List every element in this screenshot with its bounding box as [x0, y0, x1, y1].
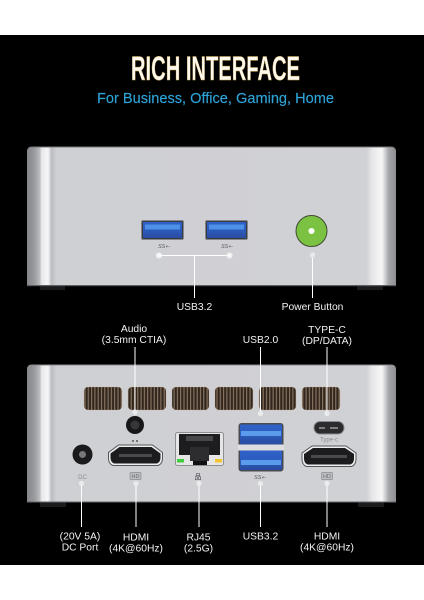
panel: front of mini PC: [27, 147, 396, 290]
label: DC Port: DC Port: [62, 542, 98, 553]
label: HDMI right: (4K@60Hz): [300, 542, 354, 553]
title: RICH INTERFACE: [131, 50, 300, 88]
label: HDMI left: (4K@60Hz): [109, 543, 163, 554]
subtitle: For Business, Office, Gaming, Home: [97, 91, 334, 107]
label: TYPE-C: TYPE-C: [308, 325, 346, 336]
label: DC Port: (20V 5A): [60, 532, 100, 542]
label: RJ45: (2.5G): [184, 543, 213, 554]
icon: front USB port right: [206, 220, 248, 250]
label: USB2.0: USB2.0: [243, 335, 279, 346]
icon: DC jack: DC: [78, 475, 87, 481]
icon: HDMI port right: HD: [323, 474, 331, 480]
label: HDMI right: HDMI: [314, 532, 340, 542]
label: USB3.2 rear: USB3.2: [243, 532, 279, 542]
vents: [84, 387, 340, 410]
icon: Type-C port: [314, 422, 344, 444]
icon: stacked USB ports: [238, 423, 284, 481]
callout: front USB3.2 connector: [156, 253, 232, 298]
icon: DC jack: [72, 444, 92, 481]
icon: HDMI port left: [108, 445, 162, 480]
icon: HDMI port left: HD: [132, 474, 139, 480]
icon: RJ45 port: 品: [194, 473, 202, 481]
icon: front USB port left: [142, 220, 184, 250]
label: HDMI left: HDMI: [123, 532, 149, 544]
icon: audio jack: [126, 416, 144, 442]
icon: front USB port left: SS⇠: [158, 244, 170, 250]
callout: rear leader lines: [79, 347, 330, 527]
icon: RJ45 port: [176, 432, 224, 481]
icon: front USB port right: SS⇠: [221, 244, 233, 250]
label: Audio: Audio: [121, 324, 147, 335]
panel: rear of mini PC: [27, 365, 396, 507]
icon: Type-C port: Type-c: [320, 438, 338, 444]
icon: stacked USB ports: SS⇠: [254, 475, 266, 481]
icon: HDMI port right: [302, 446, 356, 480]
label: USB3.2 front: USB3.2: [177, 302, 213, 313]
label: Power Button: Power Button: [282, 302, 344, 313]
label: Audio: (3.5mm CTIA): [102, 335, 166, 346]
icon: power button: [296, 216, 327, 246]
callout: power button line: [310, 252, 315, 298]
label: RJ45: RJ45: [186, 532, 211, 544]
label: TYPE-C: (DP/DATA): [302, 336, 352, 347]
